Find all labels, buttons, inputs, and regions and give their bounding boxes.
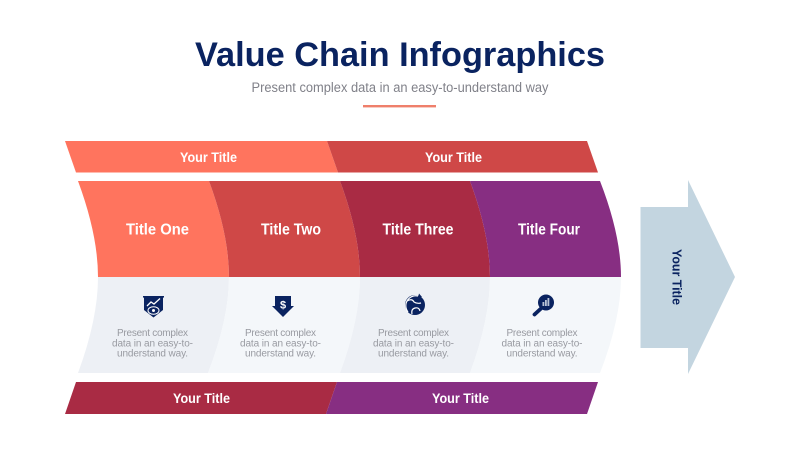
panel: description two: understand way. [245,348,316,360]
top band segment: right: Your Title [425,150,482,165]
icon: down arrow with dollar: $ [280,300,286,312]
icon: globe with arrow [405,294,425,315]
panel: description one: data in an easy-to- [112,338,193,349]
top band segment: left: Your Title [180,150,237,165]
panel: description three: understand way. [378,348,449,360]
panel: description two: Present complex [245,328,316,339]
panel: description two [208,277,360,373]
panel: description one [78,277,229,373]
panel: description four: understand way. [506,348,578,360]
panel: description three: Present complex [378,328,449,339]
panel: description one: understand way. [117,348,188,360]
panel: description four: Present complex [506,328,578,339]
panel: description two: data in an easy-to- [240,338,321,349]
arrow: value outcome: Your Title [670,249,684,305]
subtitle: Present complex data in an easy-to-understand way [252,80,549,95]
segment: title two: Title Two [261,222,321,238]
panel: description three [340,277,490,373]
segment: title two [209,181,360,277]
segment: title four: Title Four [518,222,580,238]
accent underline [363,105,436,107]
icon: magnifier with bars [534,294,554,314]
bottom band segment: left [65,382,337,414]
segment: title three [340,181,490,277]
segment: title one: Title One [126,222,189,238]
bottom band segment: left: Your Title [173,391,230,406]
header [195,36,605,107]
lower light panels [78,277,621,373]
panel: description three: data in an easy-to- [373,338,454,349]
icon: down arrow with dollar [272,296,294,317]
top band [65,141,598,172]
segment: title three: Title Three [382,222,454,238]
panel: description four: data in an easy-to- [502,338,582,349]
bottom band segment: right [326,382,598,414]
bottom band [65,382,598,414]
panel: description four [470,277,621,373]
top band segment: right [327,141,598,172]
bottom band segment: right: Your Title [432,391,489,406]
arrow: value outcome [640,180,735,374]
segment: title one [78,181,229,277]
segment: title four [470,181,621,277]
title: Value Chain Infographics [195,36,605,74]
curved title segments [78,181,621,277]
top band segment: left [65,141,338,172]
icon: chart and eye shield [143,296,164,318]
panel: description one: Present complex [117,328,188,339]
